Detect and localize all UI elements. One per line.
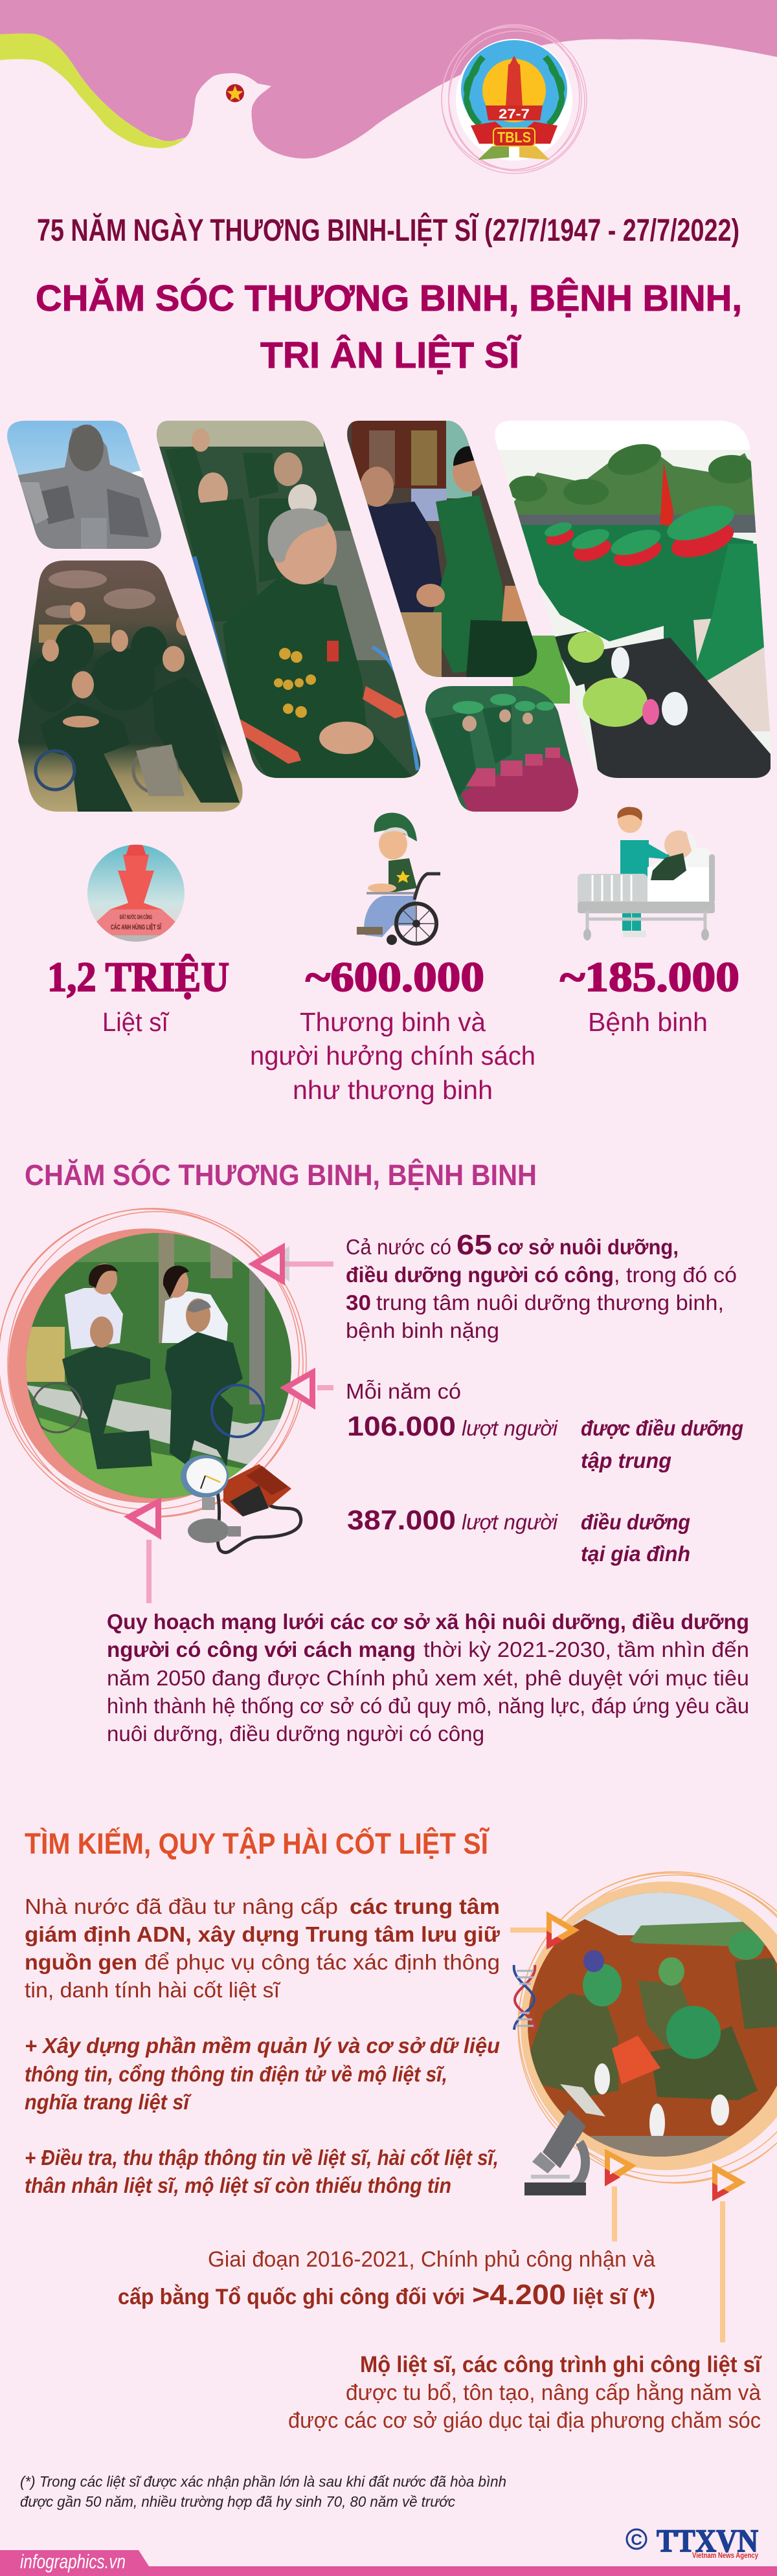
text: DNA centers: nguồn gen — [25, 1950, 137, 1974]
text: information gathering — [25, 2146, 499, 2197]
text: network planning: năm 2050 đang được Chính phủ xem xét, phê duyệt với mục tiêu — [107, 1666, 749, 1690]
icon: blood pressure gauge — [181, 1455, 301, 1553]
text: software database — [25, 2034, 500, 2114]
text: software database: thông tin, cổng thông tin điện tử về mộ liệt sĩ, — [25, 2062, 447, 2086]
text: network planning: người có công với cách mạng — [107, 1638, 416, 1661]
text: network planning — [107, 1610, 749, 1746]
text: yearly figures: 106.000 — [347, 1411, 456, 1442]
emblem date: 27-7 — [499, 107, 530, 122]
text: DNA centers: Nhà nước đã đầu tư nâng cấp — [25, 1894, 338, 1918]
photo: Mother statue — [7, 421, 161, 549]
footer band: infographics.vn — [20, 2550, 126, 2573]
text: care facilities: bệnh binh nặng — [346, 1318, 499, 1342]
monument inscription: ĐẤT NƯỚC GHI CÔNG — [120, 913, 152, 920]
text: DNA centers — [25, 1894, 500, 2002]
title: main line 1: CHĂM SÓC THƯƠNG BINH, BỆNH BINH, — [36, 277, 742, 319]
text: network planning: hình thành hệ thống cơ sở có đủ quy mô, năng lực, đáp ứng yêu cầu — [107, 1694, 749, 1718]
text: yearly figures: tại gia đình — [581, 1542, 690, 1566]
text: recognition statistic: Giai đoạn 2016-2021, Chính phủ công nhận và — [208, 2247, 655, 2272]
photo: veterans in wheelchairs crowd — [13, 557, 249, 816]
icon: dove star — [226, 84, 244, 102]
text: care facilities: , trong đó có — [614, 1263, 737, 1287]
text: network planning: Quy hoạch mạng lưới các cơ sở xã hội nuôi dưỡng, điều dưỡng — [107, 1610, 749, 1634]
accent: green block behind photos — [513, 636, 570, 704]
stat icon: nurse and bedridden patient — [578, 807, 715, 940]
stat: war invalids: Thương binh và — [300, 1007, 486, 1037]
text: care facilities — [346, 1229, 737, 1342]
heading: care section: CHĂM SÓC THƯƠNG BINH, BỆNH BINH — [25, 1159, 537, 1192]
arrow: to DNA text — [510, 1911, 580, 1949]
text: graves upkeep — [288, 2352, 762, 2433]
photo: nurses with veterans in circle — [0, 1208, 306, 1517]
text: yearly figures — [346, 1379, 743, 1566]
text: DNA centers: tin, danh tính hài cốt liệt sĩ — [25, 1978, 281, 2002]
text: graves upkeep: được tu bổ, tôn tạo, nâng cấp hằng năm và — [346, 2381, 761, 2405]
text: care facilities: 30 — [346, 1291, 371, 1315]
text: yearly figures: Mỗi năm có — [346, 1379, 461, 1403]
footer band — [0, 2550, 777, 2576]
text: yearly figures: 387.000 — [347, 1505, 456, 1536]
icon: microscope — [524, 2109, 586, 2195]
arrow: to recognition text — [605, 2149, 636, 2241]
heading: search section: TÌM KIẾM, QUY TẬP HÀI CỐT LIỆT SĨ — [25, 1827, 490, 1860]
stat icon: monument — [87, 845, 185, 942]
text: recognition statistic — [118, 2247, 655, 2311]
text: information gathering: + Điều tra, thu thập thông tin về liệt sĩ, hài cốt liệt sĩ, — [25, 2146, 499, 2170]
stat icon: monument: CÁC ANH HÙNG LIỆT SĨ — [111, 923, 162, 931]
text: yearly figures: điều dưỡng — [581, 1510, 690, 1534]
photo: honor guard at graves — [489, 414, 777, 783]
text: care facilities: trung tâm nuôi dưỡng thương binh, — [376, 1291, 724, 1315]
text: DNA centers: các trung tâm — [350, 1894, 500, 1918]
stat: war invalids: ~600.000 — [306, 954, 484, 1001]
arrow: to second text — [280, 1368, 333, 1410]
photo: veteran with medals — [149, 414, 427, 783]
logo: TTXVN: TTXVN — [657, 2522, 758, 2559]
photo: soldiers excavating in circle — [518, 1872, 777, 2183]
text: graves upkeep: được các cơ sở giáo dục tại địa phương chăm sóc — [288, 2408, 761, 2433]
text: software database: + Xây dựng phần mềm quản lý và cơ sở dữ liệu — [25, 2034, 500, 2058]
logo: TTXVN — [627, 2522, 758, 2560]
footnote — [20, 2473, 506, 2510]
text: recognition statistic: liệt sĩ (*) — [572, 2285, 655, 2309]
photo: soldier visiting elder — [347, 421, 537, 677]
stat: war invalids: người hưởng chính sách — [250, 1041, 535, 1071]
text: care facilities: Cả nước có — [346, 1235, 451, 1259]
text: graves upkeep: Mộ liệt sĩ, các công trình ghi công liệt sĩ — [360, 2352, 762, 2377]
photo: soldiers at red graves — [425, 686, 578, 812]
text: DNA centers: giám định ADN, xây dựng Trung tâm lưu giữ — [25, 1922, 500, 1946]
arrow: to first text — [248, 1243, 333, 1285]
text: network planning: nuôi dưỡng, điều dưỡng người có công — [107, 1722, 484, 1746]
header: pink wave with dove — [0, 0, 777, 159]
stat: war invalids: như thương binh — [293, 1075, 493, 1105]
arrow: to planning text — [124, 1497, 161, 1603]
stat: martyrs: 1,2 TRIỆU — [47, 954, 229, 1001]
text: yearly figures: được điều dưỡng — [581, 1416, 743, 1440]
text: recognition statistic: cấp bằng Tổ quốc ghi công đối với — [118, 2285, 465, 2309]
stat: sick soldiers — [560, 954, 739, 1037]
logo: TTXVN: Vietnam News Agency — [692, 2551, 758, 2560]
footnote: được gần 50 năm, nhiều trường hợp đã hy sinh 70, 80 năm về trước — [20, 2493, 455, 2510]
stat: martyrs: Liệt sĩ — [102, 1007, 169, 1037]
stat icon: veteran in wheelchair — [357, 813, 440, 945]
logo: TTXVN: C — [631, 2531, 642, 2549]
text: DNA centers: để phục vụ công tác xác định thông — [144, 1950, 500, 1974]
title: main line 2: TRI ÂN LIỆT SĨ — [260, 334, 521, 376]
arrow: to graves text — [712, 2163, 746, 2342]
footnote: (*) Trong các liệt sĩ được xác nhận phần lớn là sau khi đất nước đã hòa bình — [20, 2473, 506, 2490]
logo: TBLS emblem — [442, 25, 587, 173]
text: yearly figures: tập trung — [581, 1449, 671, 1472]
stat: war invalids — [250, 954, 535, 1105]
text: information gathering: thân nhân liệt sĩ, mộ liệt sĩ còn thiếu thông tin — [25, 2173, 451, 2197]
stat: sick soldiers: ~185.000 — [560, 954, 739, 1001]
stat: sick soldiers: Bệnh binh — [588, 1007, 708, 1037]
text: software database: nghĩa trang liệt sĩ — [25, 2090, 192, 2114]
text: recognition statistic: >4.200 — [472, 2279, 566, 2311]
text: network planning: thời kỳ 2021-2030, tầm nhìn đến — [423, 1638, 749, 1661]
text: care facilities: điều dưỡng người có công — [346, 1263, 614, 1287]
icon: DNA helix — [514, 1965, 535, 2030]
emblem initials: TBLS — [497, 129, 531, 146]
text: yearly figures: lượt người — [462, 1416, 559, 1440]
stat: martyrs — [47, 954, 229, 1037]
text: care facilities: 65 — [456, 1229, 492, 1261]
text: yearly figures: lượt người — [462, 1510, 559, 1534]
text: care facilities: cơ sở nuôi dưỡng, — [497, 1235, 679, 1259]
